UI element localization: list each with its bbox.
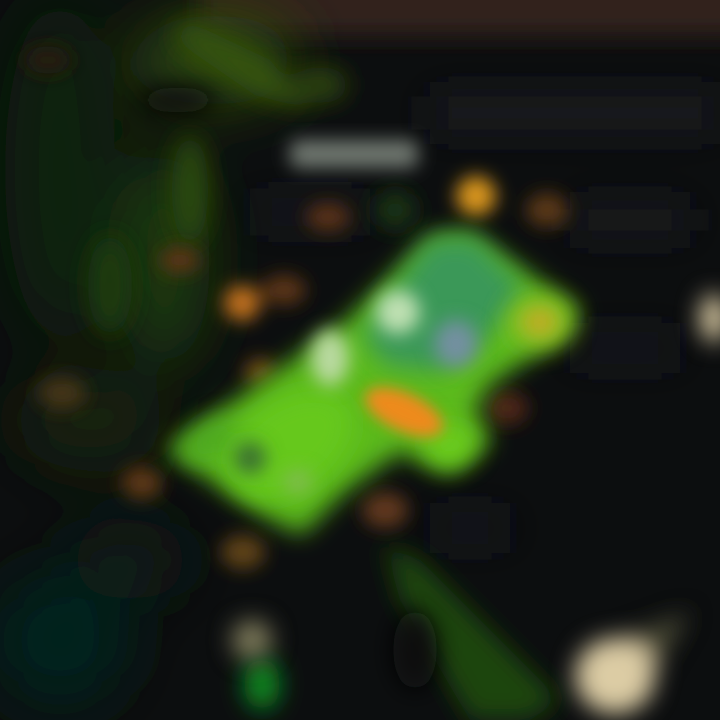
light orbs [232, 294, 720, 714]
background: brown top band [200, 0, 720, 36]
background: dark panel lines [250, 95, 720, 541]
foliage: left green [0, 0, 295, 710]
orange dots [24, 46, 568, 569]
green card: orange pill [358, 377, 450, 447]
green card: teal upper panel [362, 238, 525, 372]
green card [165, 232, 580, 535]
heading blur [290, 140, 418, 168]
green card: pale and grey icons [234, 290, 556, 494]
green card: lime highlights [176, 296, 572, 522]
dark hollows in foliage [140, 87, 437, 690]
foliage: bright leaf highlights [88, 20, 560, 720]
